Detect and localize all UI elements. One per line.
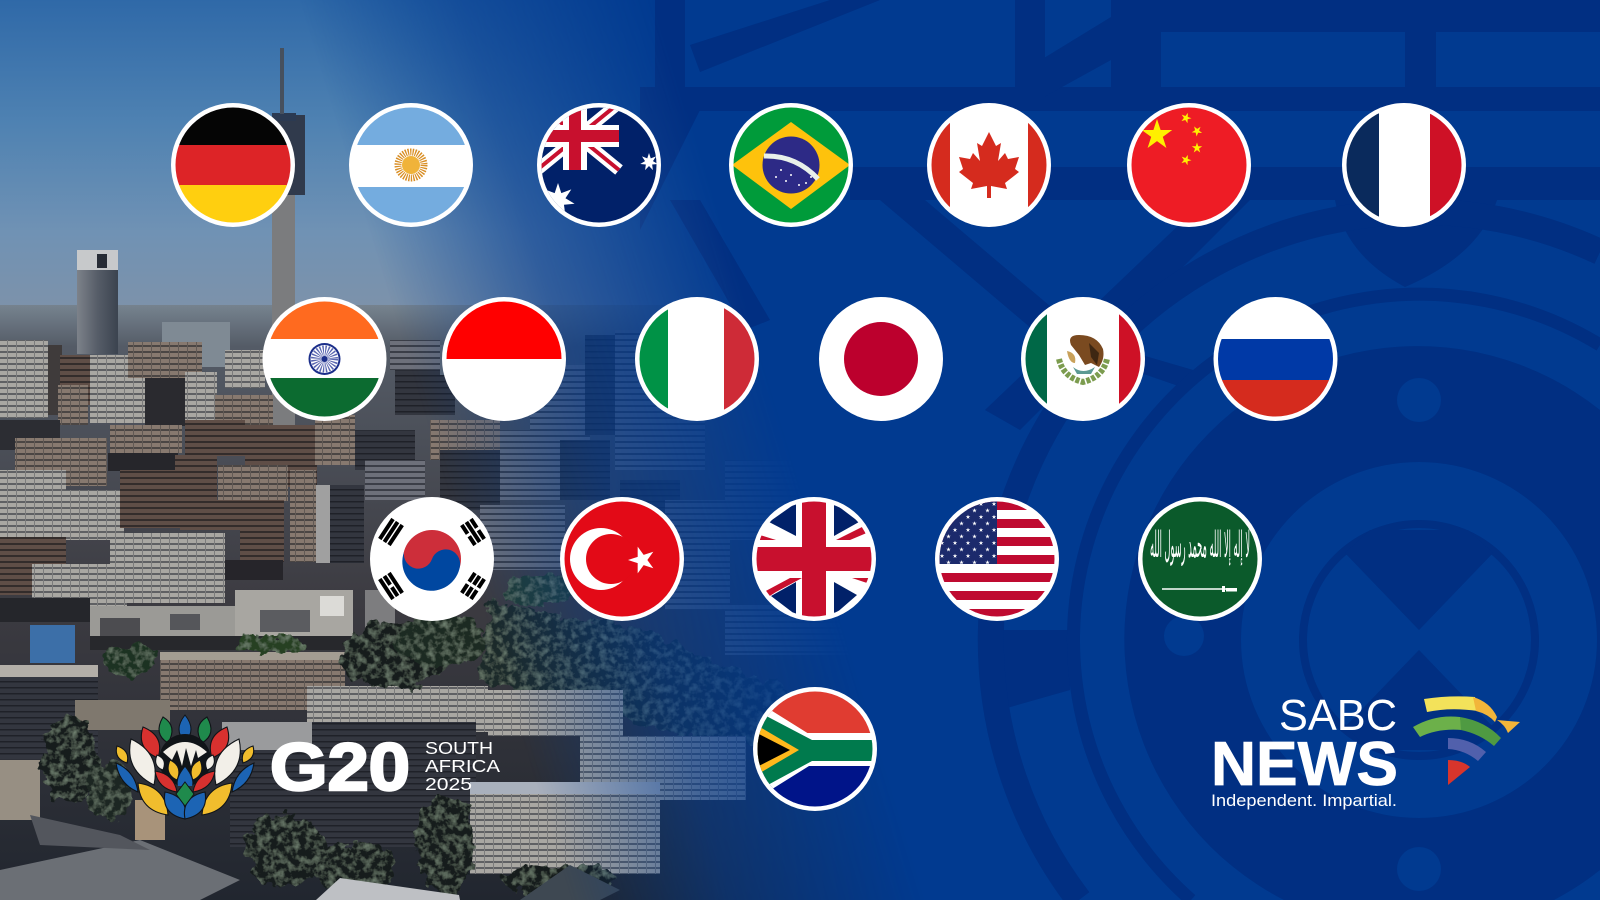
flag: United Kingdom xyxy=(752,497,876,621)
dark ring band xyxy=(1124,346,1600,900)
flag: Germany xyxy=(171,103,295,227)
city ground xyxy=(0,305,1000,900)
flag: South Africa xyxy=(753,687,877,811)
flag: United States xyxy=(935,497,1059,621)
flag: Saudi Arabia xyxy=(1138,497,1262,621)
geometric pattern xyxy=(640,0,1600,710)
South Africa 2025 text xyxy=(425,738,500,794)
logo: SABC News xyxy=(1211,691,1520,810)
lighter dots xyxy=(1164,378,1441,891)
flag: China xyxy=(1127,103,1251,227)
flag: France xyxy=(1342,103,1466,227)
flag: Japan xyxy=(819,297,943,421)
South Africa 2025 text: 2025 xyxy=(425,774,472,794)
trees xyxy=(42,574,615,896)
SABC map emblem xyxy=(1413,696,1520,785)
flag: South Korea xyxy=(370,497,494,621)
South Africa 2025 text: SOUTH xyxy=(425,738,493,758)
mid buildings xyxy=(0,533,746,874)
flag: Argentina xyxy=(349,103,473,227)
NEWS wordmark: NEWS xyxy=(1211,730,1398,799)
flag: Brazil xyxy=(729,103,853,227)
protea emblem xyxy=(116,715,254,819)
text: لا إله إلا الله محمد رسول الله xyxy=(1150,523,1250,567)
flag: India xyxy=(262,297,386,421)
G20 wordmark: G20 xyxy=(270,730,410,805)
flag: Canada xyxy=(927,103,1051,227)
concentric rings xyxy=(991,212,1600,900)
blue pattern panel fading over photo xyxy=(344,0,1600,900)
flag: Mexico xyxy=(1021,297,1145,421)
trigrams xyxy=(380,519,484,599)
flag: Australia xyxy=(537,103,661,227)
SABC wordmark: SABC xyxy=(1279,691,1397,740)
flag: Turkey xyxy=(560,497,684,621)
flag: Russia xyxy=(1214,297,1338,421)
far buildings xyxy=(0,322,865,655)
flag: Italy xyxy=(635,297,759,421)
rooftops xyxy=(0,815,620,900)
South Africa 2025 text: AFRICA xyxy=(425,756,500,776)
hillside trees xyxy=(480,600,800,760)
Hillbrow tower xyxy=(272,48,305,430)
logo: G20 South Africa 2025 xyxy=(116,715,500,819)
centre lozenge xyxy=(1345,530,1493,750)
tagline: Independent. Impartial. xyxy=(1211,791,1397,810)
sky xyxy=(0,0,1000,310)
flag: Indonesia xyxy=(442,297,566,421)
Ponte tower xyxy=(77,250,118,354)
city photo background xyxy=(0,0,1000,900)
